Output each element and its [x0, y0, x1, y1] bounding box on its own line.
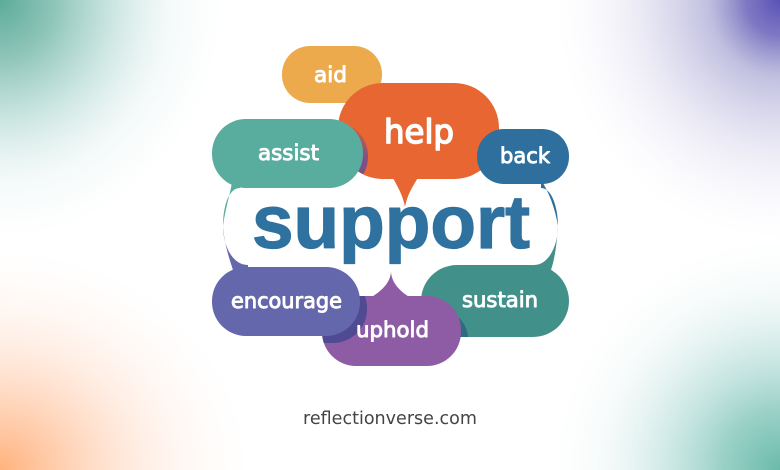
bubble: back: back — [500, 144, 551, 168]
bubble: aid: aid — [314, 63, 347, 87]
bubble: aid — [282, 46, 382, 103]
central word: support: support — [252, 180, 530, 264]
bubble: assist — [212, 119, 368, 226]
bubble: sustain — [421, 226, 569, 338]
bubble: help — [338, 83, 499, 207]
bubble: help: help — [384, 113, 454, 151]
bubble: sustain: sustain — [462, 288, 538, 312]
bubble: uphold — [322, 272, 461, 366]
bubble: encourage — [212, 226, 360, 336]
bubble: encourage: encourage — [231, 289, 342, 313]
bubble: back — [477, 129, 569, 226]
bubble: uphold: uphold — [356, 318, 429, 342]
website credit: reflectionverse.com — [303, 408, 477, 429]
bubble: assist: assist — [258, 141, 319, 165]
